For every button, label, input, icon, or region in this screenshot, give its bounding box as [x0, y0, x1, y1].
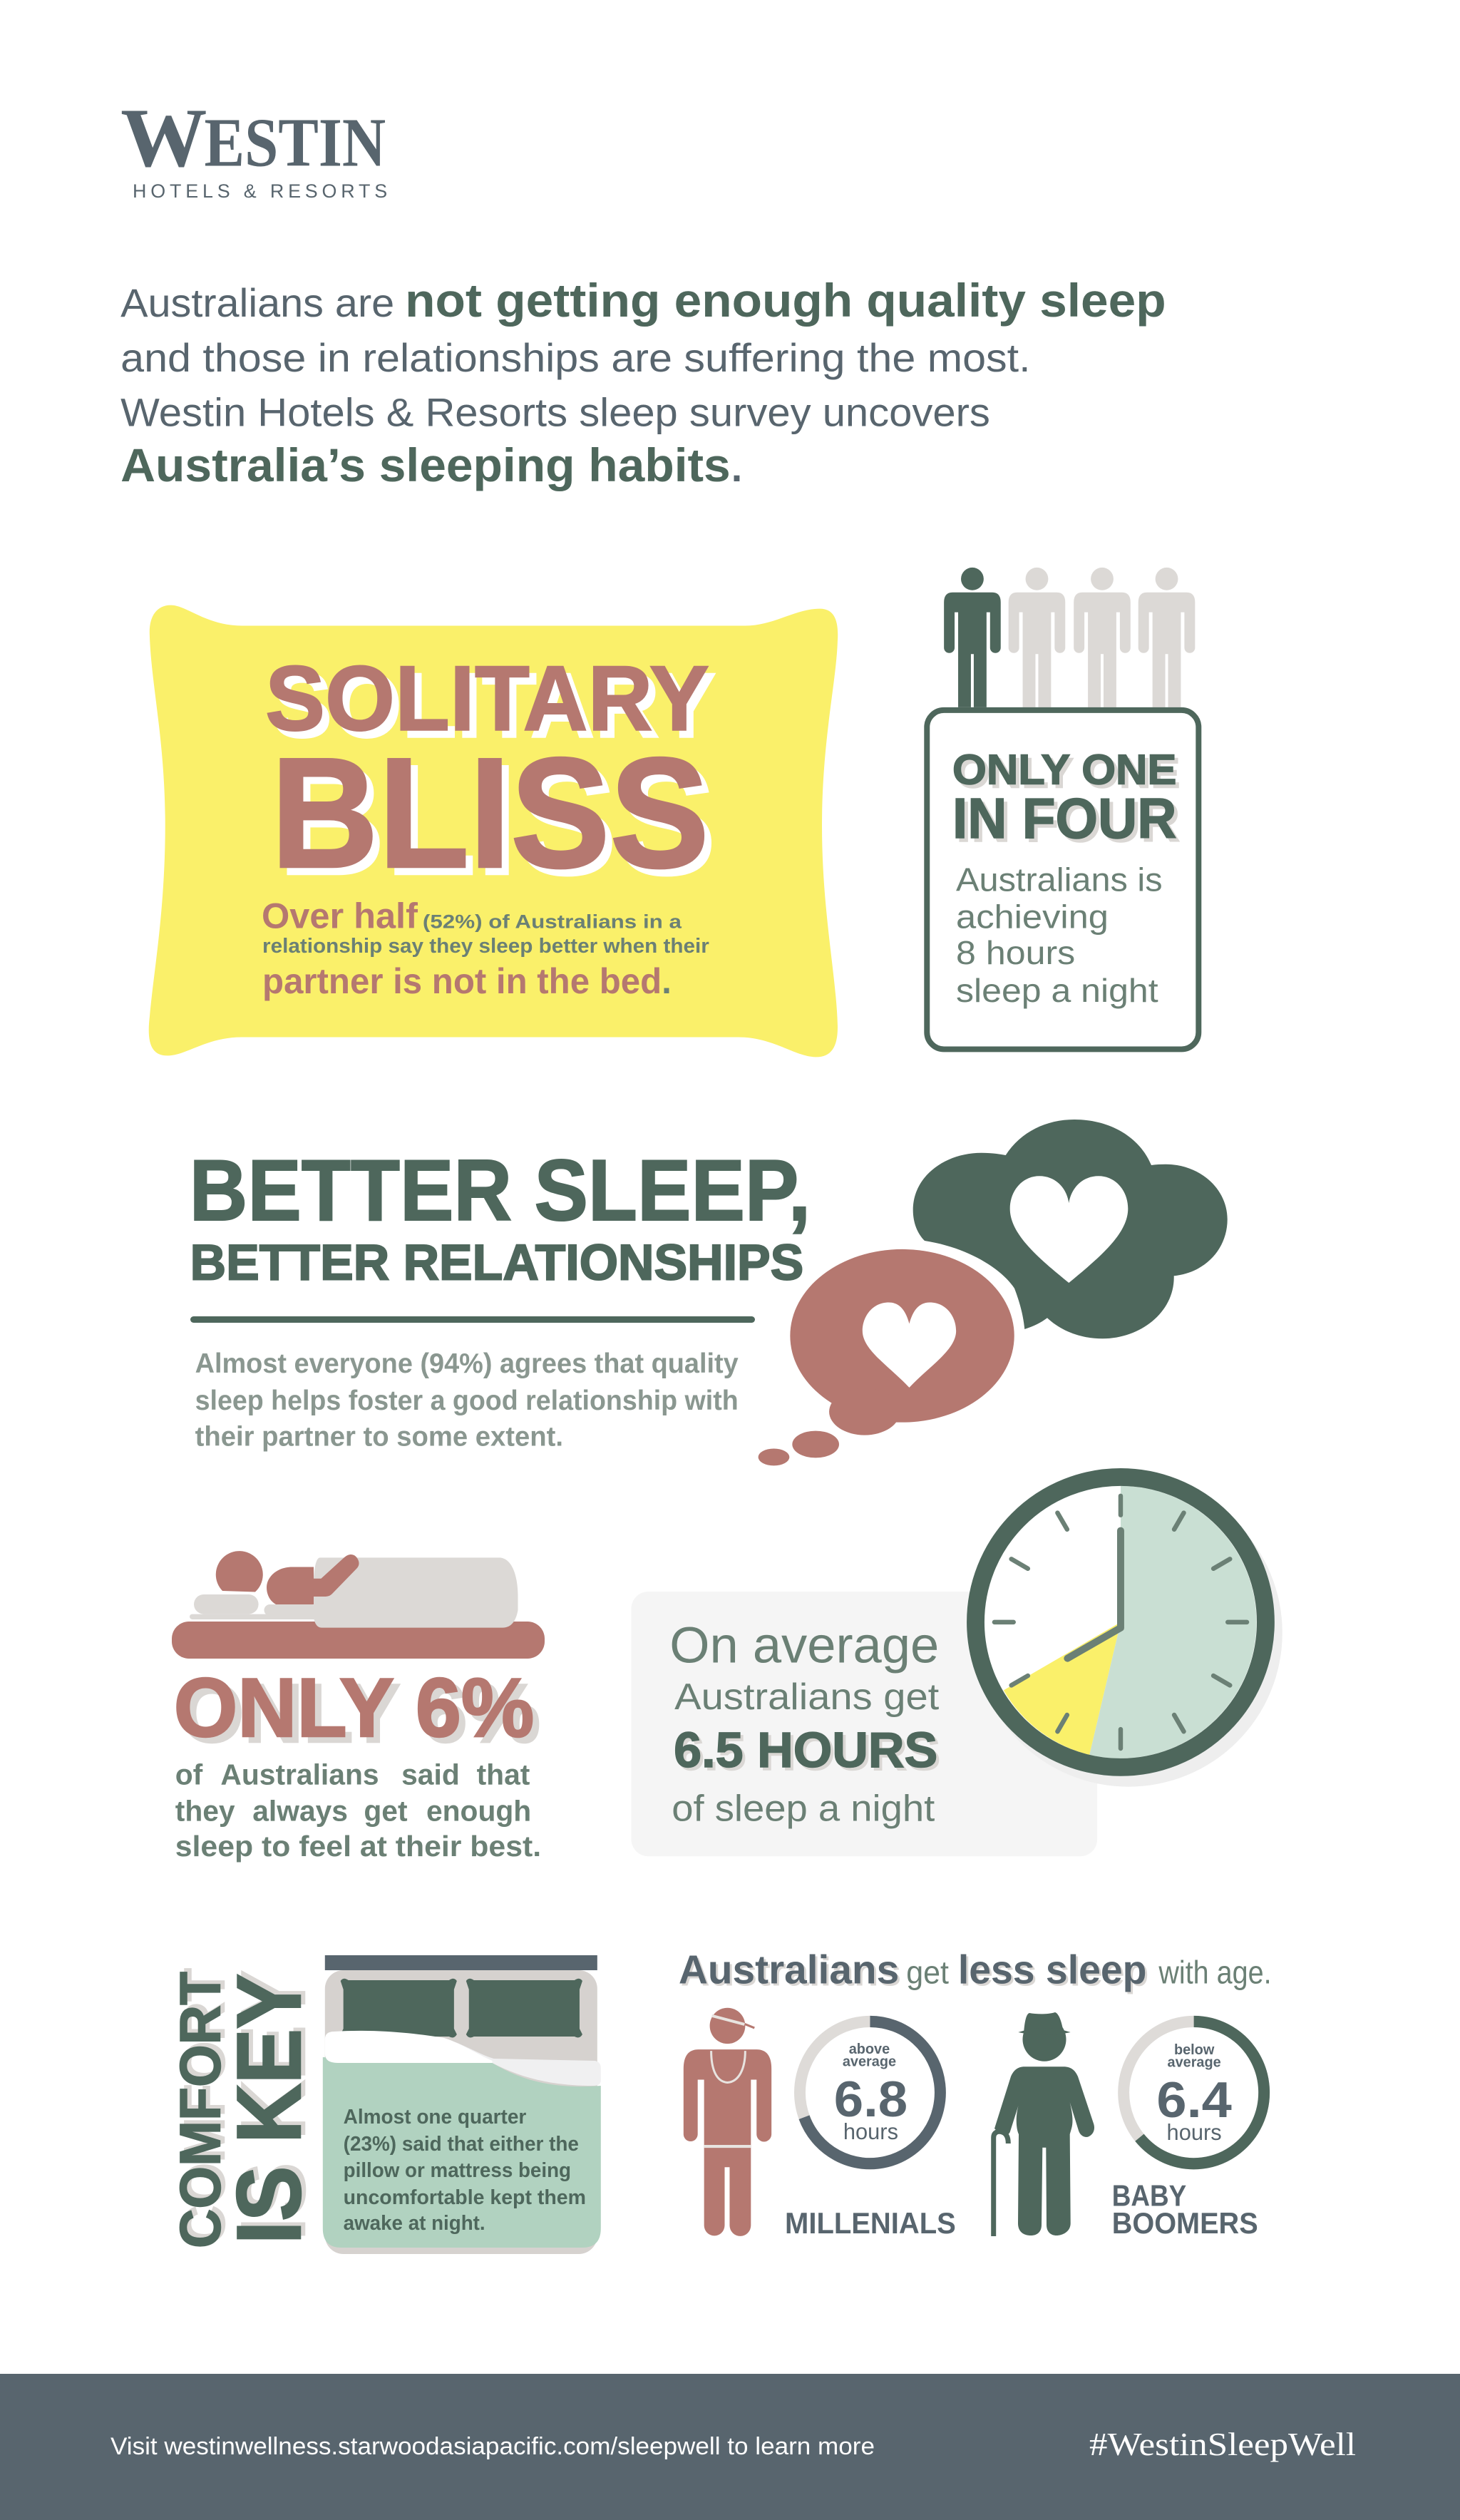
logo: Westin Hotels & Resorts — [120, 91, 387, 202]
logo: Westin Hotels & Resorts: W — [120, 91, 207, 184]
text block: of Australians said: said — [401, 1758, 460, 1791]
icon: pink thought bubble with heart — [759, 1249, 1014, 1465]
text block: achieving 8 hours: achieving — [956, 898, 1109, 935]
heading: better sleep, better relationships: BETTER RELATIONSHIPS — [190, 1234, 803, 1291]
text block: on average 6.5 hours — [669, 1617, 940, 1828]
text block: almost one quarter: (23%) said that either the — [344, 2133, 579, 2156]
heading: only one in four: IN FOUR — [952, 787, 1176, 850]
heading: solitary bliss: BLISS — [278, 732, 716, 908]
text block: almost one quarter: uncomfortable kept them — [344, 2186, 586, 2209]
heading: Australians get less sleep with age: with age. — [1158, 1954, 1272, 1991]
intro heading text: Australia’s sleeping habits — [120, 439, 731, 491]
text block: on average 6.5 hours: Australians get — [674, 1676, 939, 1717]
label: baby boomers — [1112, 2179, 1258, 2240]
text block: achieving 8 hours — [956, 861, 1163, 1009]
heading: only one in four: ONLY ONE — [952, 745, 1176, 793]
text block: almost everyone 94%: sleep helps foster a good relationship with — [195, 1386, 739, 1416]
text block: of Australians said: always — [252, 1794, 348, 1827]
heading: only 6%: ONLY 6% — [174, 1661, 534, 1754]
text block: over half statistic: relationship say they sleep better when their — [262, 935, 709, 958]
heading: Australians get less sleep with age: less sleep — [958, 1947, 1146, 1992]
text block: almost everyone 94%: Almost everyone (94%) agrees that quality — [195, 1348, 739, 1379]
heading: better sleep, better relationships — [190, 1142, 811, 1291]
text block: on average 6.5 hours: 6.5 HOURS — [674, 1722, 937, 1778]
heading: comfort is key (rotated): COMFORT — [173, 1968, 237, 2245]
chart: millennials 6.8 hours donut: hours — [843, 2119, 898, 2144]
heading: solitary bliss: SOLITARY — [265, 647, 709, 750]
text block: of Australians said: sleep to feel at their best. — [175, 1830, 541, 1863]
text block: on average 6.5 hours: of sleep a night — [672, 1787, 935, 1828]
icon: four people, one highlighted — [944, 568, 1195, 707]
chart: millennials 6.8 hours donut — [800, 2022, 940, 2163]
footer band — [0, 2374, 1460, 2520]
icon: clock — [975, 1477, 1282, 1787]
heading: comfort is key (rotated): COMFORT — [169, 1972, 232, 2248]
chart: baby boomers 6.4 hours donut: below — [1174, 2042, 1215, 2058]
text block: of Australians said: get — [364, 1794, 408, 1827]
footer hashtag: #WestinSleepWell — [1089, 2426, 1356, 2462]
text block: achieving 8 hours: sleep a night — [956, 972, 1158, 1009]
intro heading text — [120, 275, 1166, 491]
icon: baby boomer figure with hat and cane — [994, 2012, 1094, 2236]
text block: of Australians said: enough — [426, 1794, 531, 1827]
text block: almost everyone 94% — [195, 1348, 739, 1452]
label: baby boomers: BOOMERS — [1112, 2207, 1258, 2240]
panel: average hours card — [631, 1592, 1097, 1856]
heading: Australians get less sleep with age: Australians — [681, 1949, 901, 1994]
text block: almost everyone 94%: their partner to some extent. — [195, 1421, 563, 1452]
text block: of Australians said: they — [175, 1794, 235, 1827]
icon: green thought cloud with heart — [913, 1120, 1228, 1338]
icon: millennial figure — [684, 2008, 771, 2236]
text block: on average 6.5 hours: On average — [669, 1617, 939, 1674]
label: millenials: MILLENIALS — [785, 2207, 956, 2240]
text block: almost one quarter — [344, 2106, 586, 2235]
logo: Westin Hotels & Resorts: ESTIN — [205, 104, 386, 181]
text block: almost one quarter: awake at night. — [344, 2212, 485, 2235]
chart: millennials 6.8 hours donut: average — [843, 2054, 896, 2069]
text block: over half statistic: partner is not in the bed — [262, 961, 662, 1001]
heading: comfort is key (rotated): IS KEY — [222, 1970, 324, 2240]
text block: of Australians said: of — [175, 1758, 203, 1791]
chart: baby boomers 6.4 hours donut — [1124, 2022, 1264, 2163]
chart: millennials 6.8 hours donut: 6.8 — [834, 2071, 908, 2127]
heading: Australians get less sleep with age: Australians — [679, 1947, 899, 1992]
icon: person sleeping on bed — [172, 1551, 545, 1659]
heading: only one in four: IN FOUR — [956, 790, 1180, 854]
text block: over half statistic: Over half — [262, 896, 418, 936]
intro heading text: and those in relationships are suffering the most. — [120, 336, 1031, 380]
heading: better sleep, better relationships: BETTER SLEEP, — [190, 1142, 811, 1239]
heading: comfort is key (rotated) — [169, 1968, 324, 2248]
heading: Australians get less sleep with age: get — [906, 1954, 949, 1991]
heading: only 6%: ONLY 6% — [180, 1666, 540, 1760]
intro heading text: Westin Hotels & Resorts sleep survey uncovers — [120, 390, 990, 434]
chart: millennials 6.8 hours donut: above — [849, 2042, 890, 2057]
chart: baby boomers 6.4 hours donut: average — [1168, 2054, 1221, 2070]
text block: almost one quarter: Almost one quarter — [344, 2106, 526, 2129]
heading: Australians get less sleep with age: less sleep — [960, 1949, 1148, 1994]
text block: on average 6.5 hours: 6.5 HOURS — [677, 1725, 940, 1781]
icon: bed with pillows and blanket — [323, 1955, 601, 2254]
heading: comfort is key (rotated): IS KEY — [218, 1974, 320, 2244]
heading: Australians get less sleep with age — [679, 1947, 1272, 1994]
text block: almost one quarter: pillow or mattress being — [344, 2159, 571, 2182]
intro heading text: . — [731, 446, 742, 490]
icon: yellow pillow — [149, 605, 838, 1057]
panel: only one in four — [927, 710, 1198, 1049]
footer link text: Visit westinwellness.starwoodasiapacific.com/sleepwell to learn more — [110, 2433, 875, 2460]
text block: over half statistic — [262, 896, 709, 1001]
intro heading text: Australians are — [120, 281, 394, 325]
intro heading text: not getting enough quality sleep — [405, 275, 1166, 327]
chart: baby boomers 6.4 hours donut: 6.4 — [1156, 2071, 1232, 2128]
text block: of Australians said: that — [477, 1758, 530, 1791]
label: baby boomers: BABY — [1112, 2179, 1186, 2213]
text block: of Australians said: Australians — [220, 1758, 379, 1791]
text block: achieving 8 hours: 8 hours — [956, 934, 1075, 971]
chart: baby boomers 6.4 hours donut: hours — [1167, 2120, 1222, 2145]
heading: solitary bliss: SOLITARY — [272, 655, 716, 757]
text block: over half statistic: (52%) of Australians in a — [423, 911, 682, 932]
text block: over half statistic: . — [662, 961, 672, 1001]
heading: solitary bliss: BLISS — [271, 725, 709, 901]
heading: only one in four — [952, 745, 1180, 854]
heading: solitary bliss — [265, 647, 716, 908]
text block: achieving 8 hours: Australians is — [956, 861, 1163, 898]
panel: solitary bliss pillow — [149, 605, 838, 1057]
text block: of Australians said — [175, 1758, 541, 1863]
logo: Westin Hotels & Resorts: HOTELS & RESORTS — [133, 180, 387, 202]
heading: only one in four: ONLY ONE — [956, 749, 1180, 797]
